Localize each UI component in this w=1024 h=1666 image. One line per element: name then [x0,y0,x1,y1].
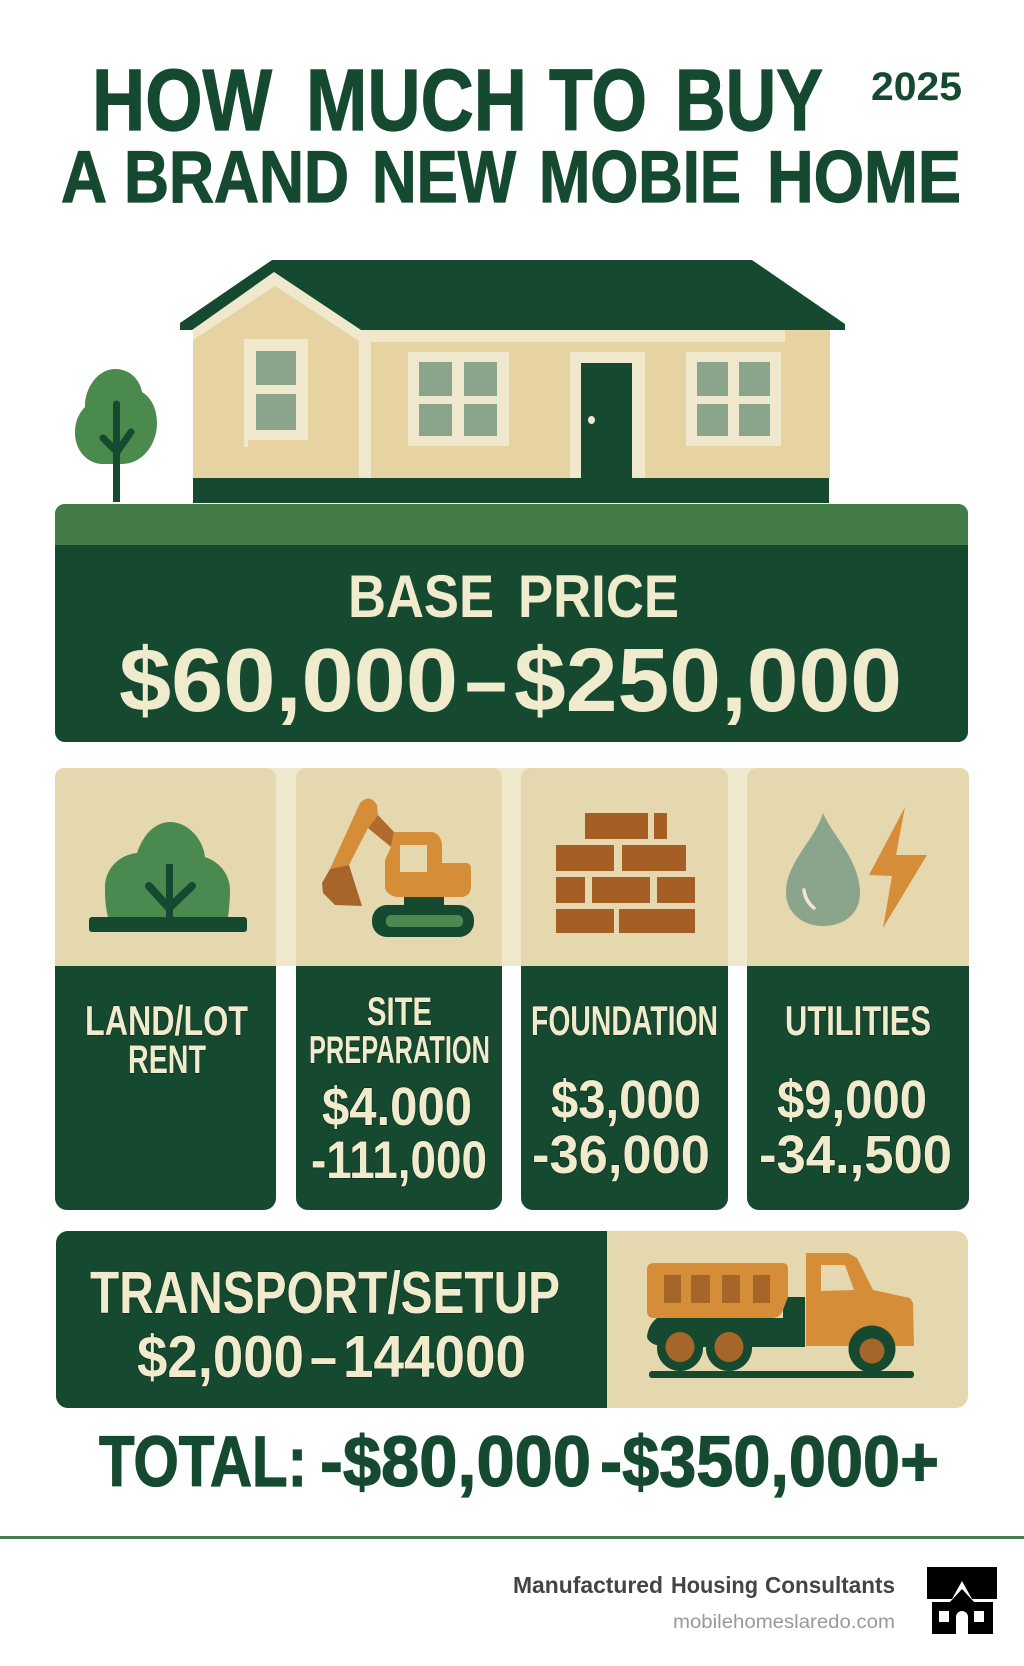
footer website: mobilehomeslaredo.com [673,1612,895,1633]
label: transport/setup: TRANSPORT/SETUP [90,1260,560,1326]
title [61,52,961,218]
cost: utilities [759,1070,952,1185]
window: middle [408,352,509,446]
heading: base price: PRICE [518,563,679,630]
icon: bush [89,822,247,932]
panel: foundation [521,768,728,1210]
title: HOME [767,137,961,218]
cost: site preparation [311,1077,487,1190]
cost: transport/setup: – [310,1324,337,1390]
icon: company logo [927,1567,997,1634]
cost: foundation [532,1070,710,1185]
cost: site preparation: -111,000 [311,1131,487,1190]
door [570,352,645,479]
title: MOBIE [539,137,741,218]
total cost: -$350,000+ [600,1423,939,1502]
cost: transport/setup [137,1324,526,1390]
base price range: $250,000 [514,631,902,731]
cost: utilities: $9,000 [777,1070,927,1130]
window: right [686,352,781,446]
title: BUY [675,52,823,149]
title: NEW [372,137,516,218]
cost: site preparation: $4.000 [322,1077,472,1137]
card strip background [55,768,969,966]
footer company name: Housing [671,1572,758,1598]
heading: base price [348,563,679,630]
total cost: TOTAL: [99,1423,307,1502]
icon: excavator [322,798,474,937]
base price range [119,631,902,731]
panel: transport/setup [56,1231,968,1408]
base price range: – [465,631,507,731]
heading: base price: BASE [348,563,494,630]
cost: foundation: $3,000 [551,1070,701,1130]
title: TO [549,52,647,149]
icon: water drop [786,813,860,926]
panel: utilities [747,768,969,1210]
icon: bricks [556,813,695,933]
label: foundation: FOUNDATION [531,997,718,1044]
label: land/lot rent: RENT [128,1038,206,1082]
house illustration [180,260,845,503]
label: site preparation: PREPARATION [309,1029,490,1072]
title: A [61,137,107,218]
title: HOW [92,52,273,149]
label: site preparation: SITE [367,990,432,1034]
cost: utilities: -34.,500 [759,1125,952,1185]
label: utilities: UTILITIES [785,997,931,1044]
footer company name: Manufactured [513,1572,663,1598]
window: left [244,339,308,447]
footer company name [513,1572,895,1598]
title: BRAND [124,137,349,218]
title: MUCH [306,52,527,149]
panel: base price [55,504,968,742]
icon: lightning bolt [869,807,927,928]
label: site preparation [309,990,490,1072]
total cost: -$80,000 [320,1423,591,1502]
cost: foundation: -36,000 [532,1125,710,1185]
year label: 2025 [871,65,962,109]
total cost [99,1423,939,1502]
panel: land/lot rent [55,768,276,1210]
cost: transport/setup: 144000 [343,1324,526,1390]
base price range: $60,000 [119,631,458,731]
icon: tree [75,369,157,502]
panel: site preparation [296,768,502,1210]
icon: truck [647,1253,914,1378]
footer company name: Consultants [765,1572,895,1598]
label: land/lot rent: LAND/LOT [85,997,248,1044]
label: land/lot rent [85,997,248,1082]
cost: transport/setup: $2,000 [137,1324,304,1390]
